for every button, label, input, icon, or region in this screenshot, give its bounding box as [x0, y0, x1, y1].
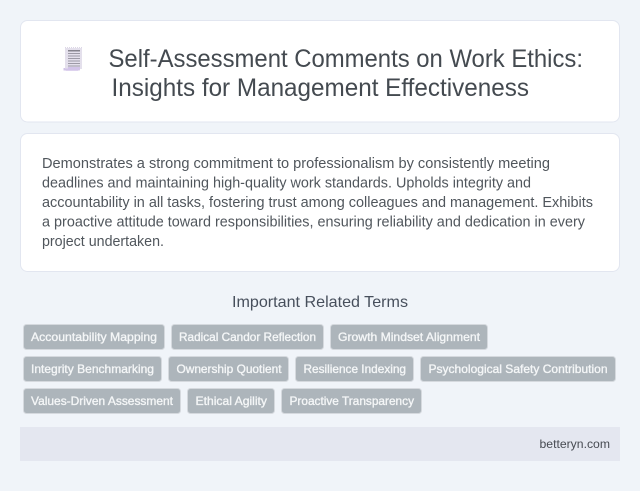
tag: Psychological Safety Contribution [420, 356, 616, 382]
text block: description: project undertaken. [42, 234, 164, 250]
tag: Accountability Mapping: Accountability Mapping [31, 330, 157, 344]
text block: description: deadlines and maintaining high-quality work standards. Upholds integrity and [42, 176, 531, 192]
tag: Radical Candor Reflection [172, 324, 324, 350]
footer text: site name: betteryn.com [540, 437, 610, 451]
title: Self-Assessment Comments on Work Ethics: [108, 45, 583, 73]
tag: Resilience Indexing: Resilience Indexing [304, 362, 406, 376]
tag: Proactive Transparency [282, 388, 422, 414]
panel: description card [20, 134, 620, 272]
tag: Ownership Quotient: Ownership Quotient [176, 362, 282, 376]
tag: Ethical Agility: Ethical Agility [196, 394, 267, 408]
tag: Ownership Quotient [168, 356, 288, 382]
tag: Integrity Benchmarking: Integrity Benchmarking [31, 362, 154, 376]
tag: Accountability Mapping [24, 324, 164, 350]
tag: Proactive Transparency: Proactive Transparency [290, 394, 414, 408]
tag group: related terms [24, 324, 616, 414]
footer bar [20, 427, 620, 461]
heading: related terms: Important Related Terms [232, 294, 408, 311]
tag: Growth Mindset Alignment [330, 324, 488, 350]
text block: description: accountability in all tasks, fostering trust among colleagues and management. Exhibits [42, 195, 593, 211]
tag: Values-Driven Assessment: Values-Driven Assessment [31, 394, 174, 408]
tag: Values-Driven Assessment [24, 388, 180, 414]
tag: Resilience Indexing [296, 356, 414, 382]
tag: Radical Candor Reflection: Radical Candor Reflection [179, 330, 316, 344]
icon: document scroll [64, 48, 82, 71]
text block: description: a proactive attitude toward responsibilities, ensuring reliability and dedication in every [42, 214, 586, 230]
tag: Growth Mindset Alignment: Growth Mindset Alignment [338, 330, 481, 344]
tag: Integrity Benchmarking [24, 356, 162, 382]
tag: Psychological Safety Contribution: Psychological Safety Contribution [428, 362, 608, 376]
tag: Ethical Agility [188, 388, 274, 414]
panel: title card [20, 20, 620, 122]
title: Insights for Management Effectiveness [112, 74, 529, 102]
text block: description: Demonstrates a strong commitment to professionalism by consistently meeting [42, 156, 550, 172]
